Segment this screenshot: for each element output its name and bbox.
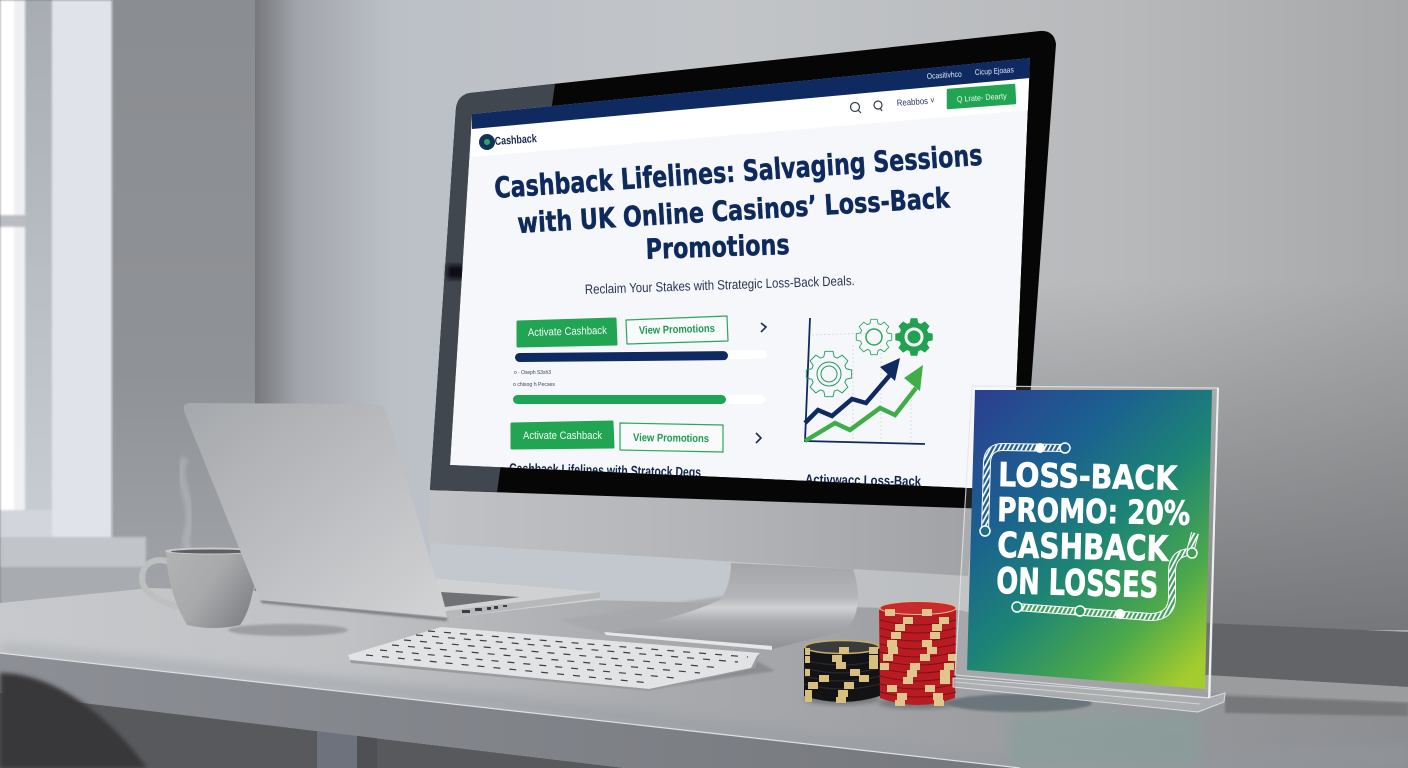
- acrylic frame and base: [953, 386, 1225, 712]
- window on the left: [0, 0, 146, 607]
- office chair in the foreground: [0, 673, 147, 768]
- site top navy bar: Ocasitivhco: [927, 70, 963, 81]
- clipped lower headings: Activwacc Loss-Back: [805, 471, 921, 489]
- sign headline: CASHBACK: [997, 526, 1170, 570]
- search icons and menu: Reabbos ˅: [896, 95, 935, 108]
- sign headline: [996, 455, 1191, 607]
- main heading: [495, 146, 982, 260]
- small stat labels: [513, 370, 555, 388]
- red poker chips: [878, 602, 958, 709]
- site top navy bar: [472, 58, 1030, 129]
- first row of buttons: [518, 316, 766, 346]
- main heading: Promotions: [645, 228, 790, 266]
- clipped lower headings: Cashback Lifelines with Stratock Degs: [509, 460, 701, 480]
- first row of buttons: View Promotions: [639, 323, 715, 337]
- clipped lower headings: [510, 463, 921, 486]
- site logo: Cashback: [494, 133, 538, 148]
- acrylic promo sign: [953, 386, 1225, 712]
- first row of buttons: Activate Cashback: [528, 325, 607, 339]
- header green button: Q Lrate- Dearty: [957, 92, 1007, 104]
- chart with gears and arrows: [805, 318, 933, 444]
- monitor chin: [428, 488, 975, 576]
- subtitle: Reclaim Your Stakes with Strategic Loss-Back Deals.: [585, 273, 855, 297]
- second row of buttons: Activate Cashback: [523, 430, 602, 442]
- coffee mug with steam and shadow: [142, 458, 348, 636]
- site top navy bar: Cicup Ejoaas: [975, 65, 1014, 77]
- black poker chips: [804, 640, 880, 705]
- monitor bezel: [430, 31, 1056, 510]
- sign shadow on the desk: [948, 694, 1092, 712]
- sign headline: LOSS-BACK: [998, 455, 1179, 498]
- monitor stand and foot: [560, 563, 858, 650]
- sign headline: PROMO: 20%: [997, 490, 1191, 533]
- main heading: Cashback Lifelines: Salvaging Sessions: [493, 138, 983, 205]
- monitor screen: [450, 58, 1030, 490]
- desk front edge and legs: [0, 653, 1020, 768]
- small stat labels: o · Oseph S3sh3: [514, 370, 551, 376]
- main heading: with UK Online Casinos’ Loss-Back: [516, 181, 952, 240]
- decorative rope top left: [980, 443, 1070, 536]
- small stat labels: o chisog h Pecses: [513, 382, 555, 388]
- keyboard: [348, 627, 775, 691]
- desk surface: [0, 588, 1408, 768]
- decorative rope bottom right: [1012, 533, 1197, 619]
- site header bar: [471, 77, 1030, 157]
- green progress bar: [513, 395, 765, 404]
- laptop: [184, 403, 600, 621]
- dark wall band right of the sign: [1205, 623, 1408, 716]
- sign headline: ON LOSSES: [996, 561, 1159, 607]
- poster background: [967, 390, 1212, 689]
- site logo: [479, 133, 538, 150]
- navy progress bar: [515, 350, 767, 362]
- header green button: [948, 85, 1015, 108]
- search icons and menu: [850, 98, 934, 114]
- second row of buttons: View Promotions: [633, 432, 709, 445]
- second row of buttons: [512, 422, 761, 452]
